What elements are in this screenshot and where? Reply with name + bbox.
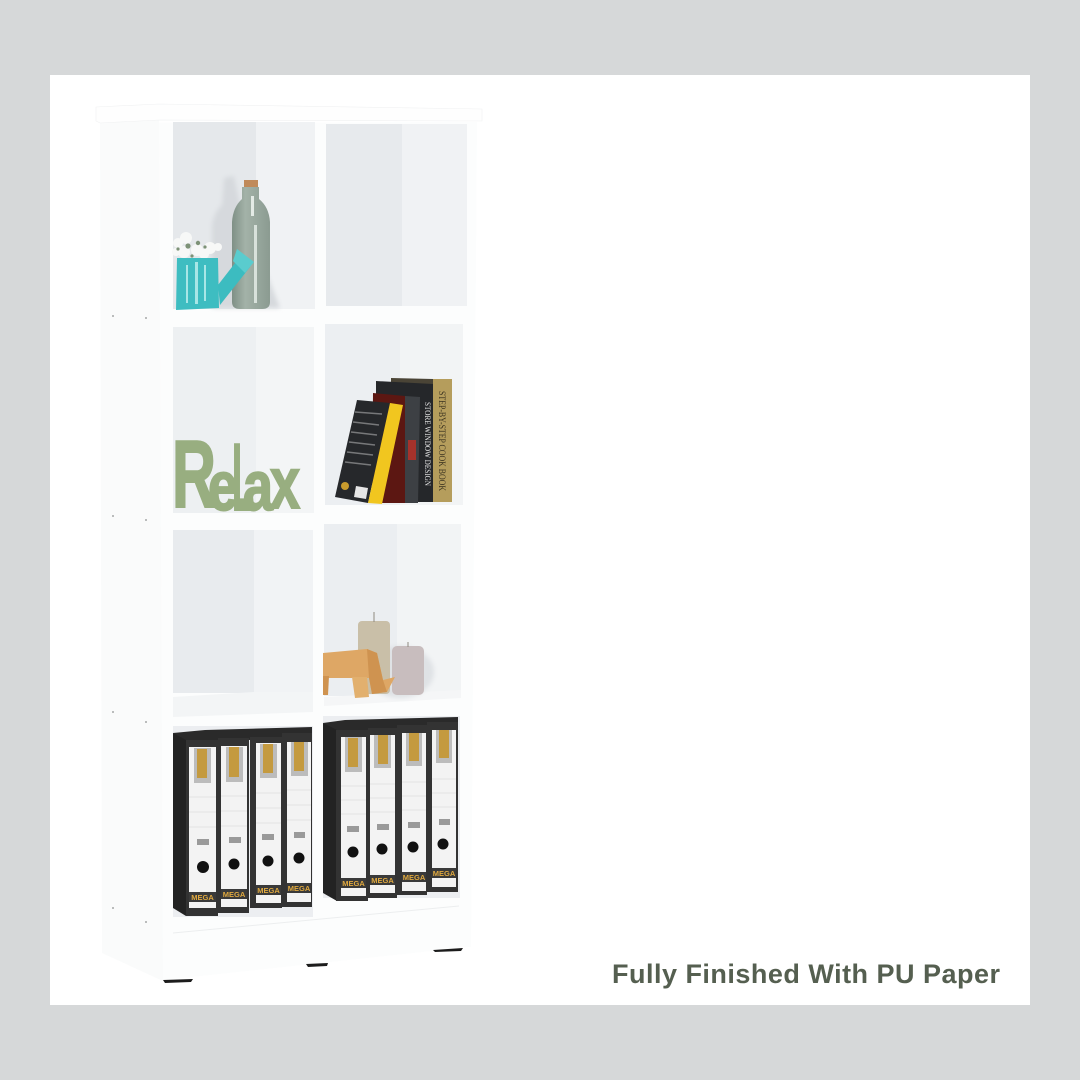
binder 2 <box>218 738 249 913</box>
bottle and shadow <box>212 176 280 309</box>
relax sign: R <box>172 421 216 528</box>
book: red cover <box>372 393 420 503</box>
binder 3: MEGA <box>257 886 280 895</box>
book: store window design: STORE WINDOW DESIGN <box>423 402 432 486</box>
side panel <box>100 120 163 981</box>
candles <box>358 612 434 698</box>
plinth edge line <box>173 906 459 933</box>
watering can with flowers <box>172 232 254 310</box>
screw holes <box>112 315 147 923</box>
row 2 right cell <box>325 324 463 505</box>
binder 2: MEGA <box>223 890 246 899</box>
caption: Fully Finished With PU Paper <box>612 959 1000 989</box>
relax sign: L <box>232 424 254 531</box>
binder 6 <box>368 728 397 898</box>
binders <box>173 722 458 916</box>
books <box>335 378 452 504</box>
relax sign: a <box>243 447 274 525</box>
feet <box>163 948 463 983</box>
book: leaning black paperback <box>335 400 403 504</box>
row 1 right cell <box>326 124 467 306</box>
top board <box>96 104 482 123</box>
binder 6: MEGA <box>371 876 394 885</box>
white panel <box>50 75 1030 1005</box>
binder 1 <box>173 733 218 916</box>
relax sign <box>172 421 300 531</box>
binder 1: MEGA <box>191 893 214 902</box>
binder 5: MEGA <box>342 879 365 888</box>
binder 4: MEGA <box>288 884 311 893</box>
bookcase carcass <box>100 122 477 981</box>
wooden rhino <box>323 649 395 698</box>
binder tops <box>173 717 458 744</box>
binder 7 <box>397 725 427 895</box>
bookcase <box>96 104 482 983</box>
row 4 left cell <box>173 726 313 917</box>
binder 8 <box>427 722 458 892</box>
binder 5 <box>323 723 368 901</box>
relax sign: x <box>270 444 300 524</box>
binder 7: MEGA <box>403 873 426 882</box>
book: gold cook book: STEP-BY-STEP COOK BOOK <box>436 391 446 491</box>
binder 4 <box>282 733 312 907</box>
row 2 left cell <box>173 327 314 513</box>
row 3 left cell <box>173 530 313 717</box>
row 1 left cell <box>173 122 315 309</box>
row 4 right cell <box>323 716 460 898</box>
binder 8: MEGA <box>433 869 456 878</box>
relax sign: e <box>208 447 238 525</box>
row 3 right cell <box>324 524 461 706</box>
binder 3 <box>250 737 282 908</box>
